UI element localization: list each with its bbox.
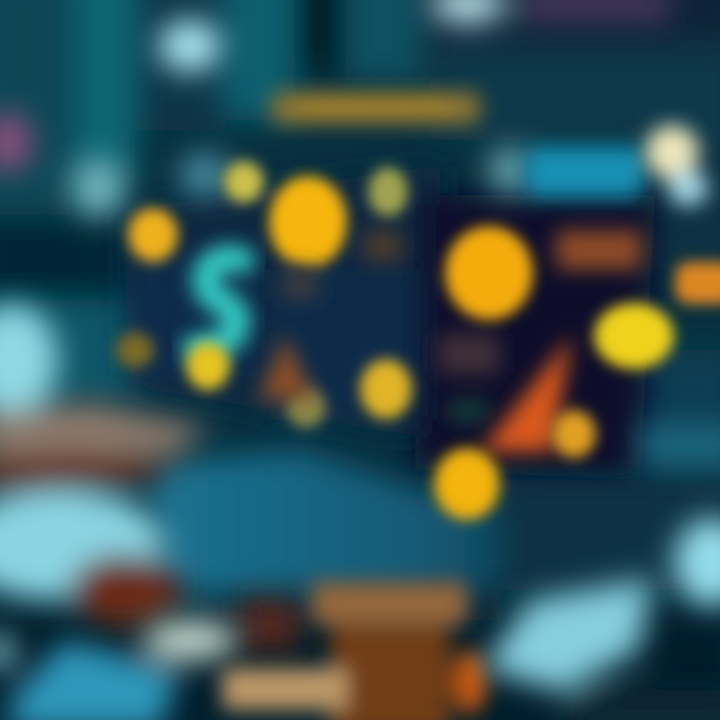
chart: small brown bars bbox=[258, 230, 642, 422]
foreground: lower left stack bbox=[0, 620, 238, 720]
panel: dark central board bbox=[125, 165, 655, 480]
icon: dollar sign bbox=[195, 258, 242, 348]
top lights bbox=[0, 0, 670, 218]
icon: pale coin top right bbox=[645, 125, 708, 206]
floor: blue surface bbox=[0, 450, 720, 720]
foreground: left papers bbox=[0, 304, 300, 650]
icon: large coin right bbox=[445, 226, 533, 320]
foreground: brown box bottom center bbox=[222, 582, 487, 720]
arrow: orange triangle bbox=[480, 335, 572, 452]
foreground: right blue cushions bbox=[482, 425, 720, 720]
callout: orange tag right edge bbox=[675, 262, 720, 304]
background: teal room bbox=[0, 0, 720, 480]
icon: coins left group bbox=[116, 161, 412, 428]
icon: oval badge right bbox=[594, 303, 674, 369]
callout: blue banner top right bbox=[525, 146, 645, 198]
icon: coins lower right bbox=[434, 410, 596, 520]
heading: blurred title bar bbox=[272, 92, 480, 124]
